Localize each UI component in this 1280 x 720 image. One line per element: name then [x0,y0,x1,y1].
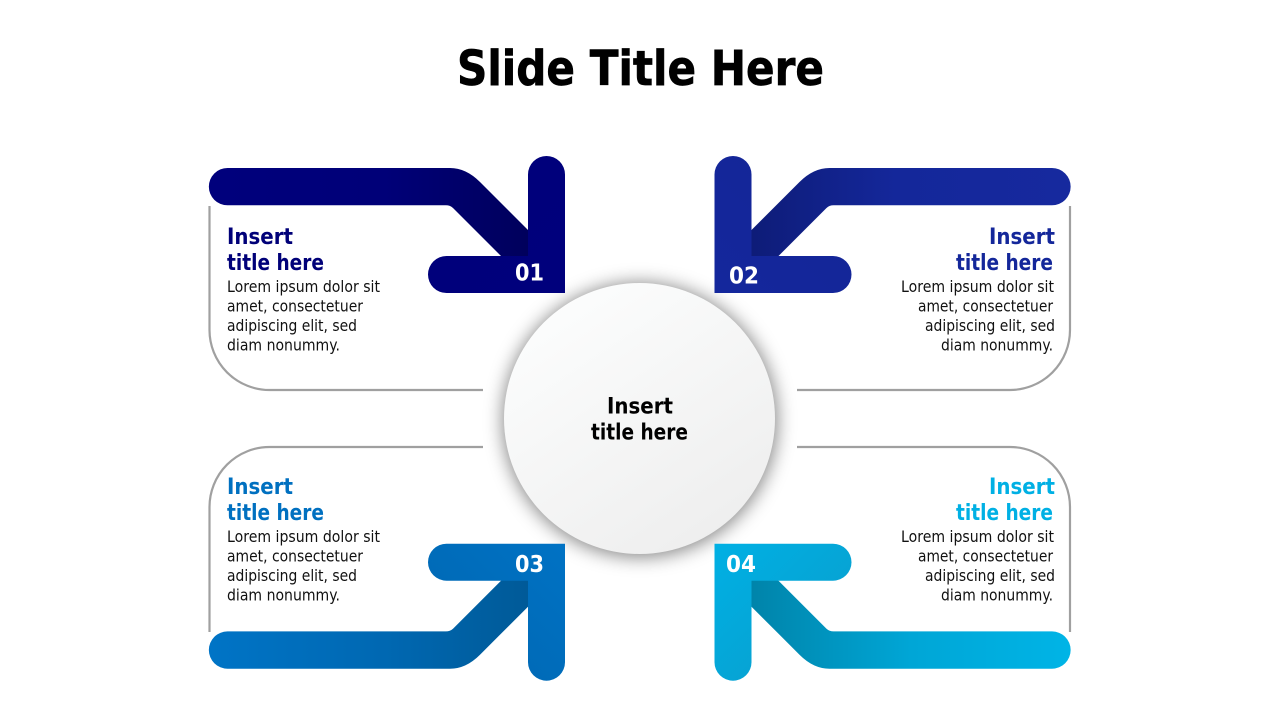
panel: 02: 02 [729,263,759,289]
panel: 04: Insert [989,475,1055,500]
panel: 03 [209,447,565,681]
panel: 01: title here [227,251,324,276]
panel: 03: 03 [515,552,544,578]
arrow 01 [209,156,565,293]
title: Slide Title Here [457,41,824,97]
panel: 03: Lorem ipsum dolor sit [227,527,380,546]
center circle: title here [591,421,688,446]
panel: 03: diam nonummy. [227,586,340,604]
panel: 04: amet, consectetuer [918,546,1053,566]
panel: 01: Insert [227,225,293,250]
panel: 01: diam nonummy. [227,336,340,354]
panel: 04: diam nonummy. [941,586,1053,604]
panel: 01: amet, consectetuer [227,296,363,316]
panel: 04: Lorem ipsum dolor sit [901,527,1054,546]
panel: 01 [209,156,565,390]
panel: 04: title here [956,501,1053,526]
arrow 03 [209,544,565,681]
panel: 03: title here [227,501,324,526]
center circle [503,283,777,557]
panel: 01: adipiscing elit, sed [227,316,357,335]
panel: 03: Insert [227,475,293,500]
arrow 02 [714,156,1071,293]
panel: 04 [714,447,1071,681]
panel: 02 [714,156,1071,390]
panel: 01: Lorem ipsum dolor sit [227,277,380,296]
panel: 02: title here [956,251,1053,276]
panel: 03: amet, consectetuer [227,546,363,566]
panel: 02: amet, consectetuer [918,296,1053,316]
panel: 04: adipiscing elit, sed [925,566,1055,585]
panel: 04: 04 [726,552,756,578]
panel: 02: diam nonummy. [941,336,1053,354]
panel: 02: adipiscing elit, sed [925,316,1055,335]
arrow 04 [714,544,1071,681]
center circle: Insert [607,395,673,420]
panel: 01: 01 [515,260,544,286]
panel: 02: Lorem ipsum dolor sit [901,277,1054,296]
panel: 03: adipiscing elit, sed [227,566,357,585]
panel: 02: Insert [989,225,1055,250]
